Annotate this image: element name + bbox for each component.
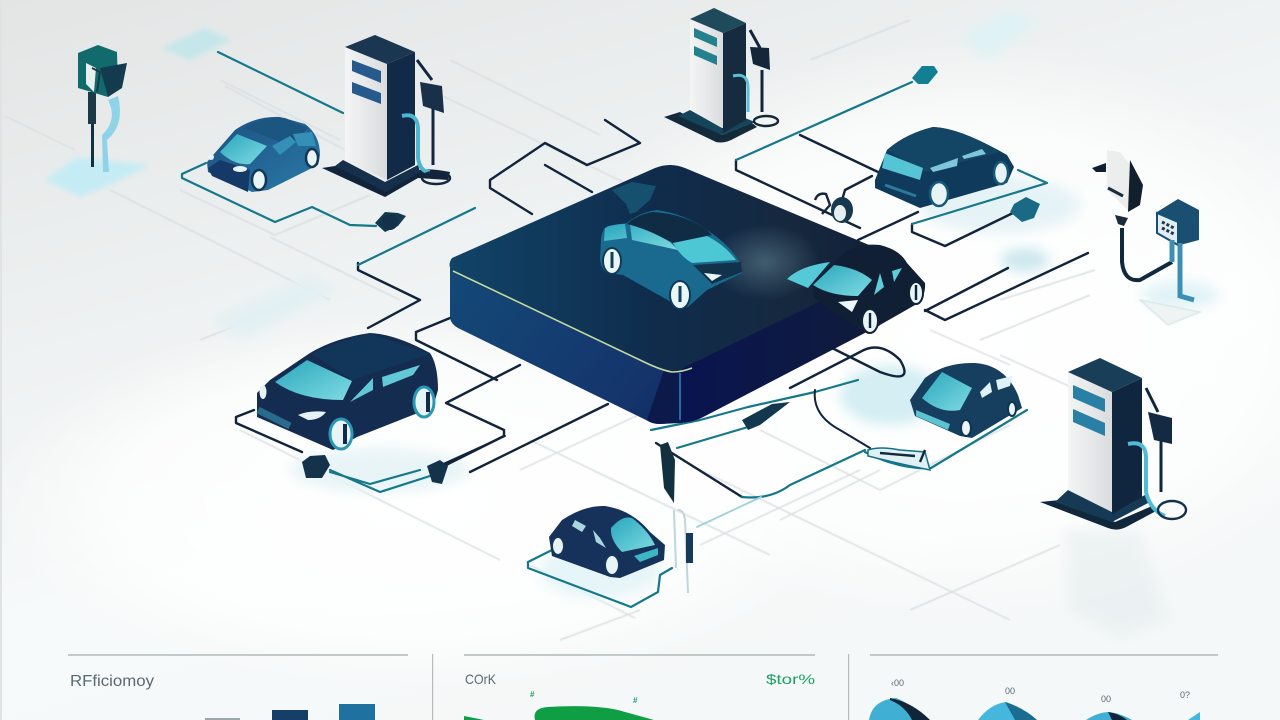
car upper left	[207, 117, 320, 192]
small car bottom	[549, 506, 665, 578]
charger tower top centre	[664, 8, 778, 142]
charger tower upper left	[322, 35, 450, 197]
pie charts	[869, 698, 1200, 720]
bar chart	[205, 704, 375, 720]
connector ring beside platform	[815, 194, 853, 223]
large car lower left	[257, 333, 438, 450]
car on platform	[600, 210, 742, 309]
chart labels: 00	[1005, 686, 1015, 696]
green area chart: #	[633, 696, 638, 705]
car lower right	[910, 363, 1022, 438]
chart labels: 00	[1101, 694, 1111, 704]
cable connector lower right	[868, 448, 930, 470]
car at platform edge	[787, 245, 925, 334]
kiosk post right	[1140, 199, 1200, 325]
chart labels: ‹00	[891, 678, 904, 688]
teal cables	[182, 52, 1047, 607]
tall connector lower centre	[660, 442, 693, 593]
chart labels	[891, 678, 1190, 704]
small device on platform	[612, 182, 656, 214]
green area chart: #	[530, 690, 535, 699]
plugs lower left	[302, 455, 448, 484]
chart labels: 0?	[1180, 690, 1190, 700]
soft teal glow patches	[162, 10, 1218, 598]
connector under platform	[742, 402, 790, 430]
ghost reflection under right charger	[1065, 530, 1170, 640]
plug top right	[912, 66, 938, 84]
charger tower lower right	[1040, 358, 1186, 530]
value: savings: $tor%	[766, 671, 815, 687]
floor grid lines	[5, 20, 1100, 640]
panel: distribution	[869, 654, 1218, 720]
heading: cost: COrK	[465, 671, 497, 687]
heading: efficiency: RFficiomoy	[70, 673, 154, 690]
cable network	[182, 52, 1088, 607]
dark cables behind platform	[236, 120, 1088, 497]
green area chart	[464, 690, 654, 720]
central platform	[450, 165, 905, 424]
plug upper left	[375, 212, 406, 232]
panel: efficiency	[68, 654, 433, 720]
wall charger right	[1092, 150, 1172, 280]
car upper right	[875, 127, 1014, 208]
panel: cost	[464, 654, 849, 720]
pedestal charger left	[45, 45, 150, 197]
plug near upper right car	[1010, 197, 1040, 222]
